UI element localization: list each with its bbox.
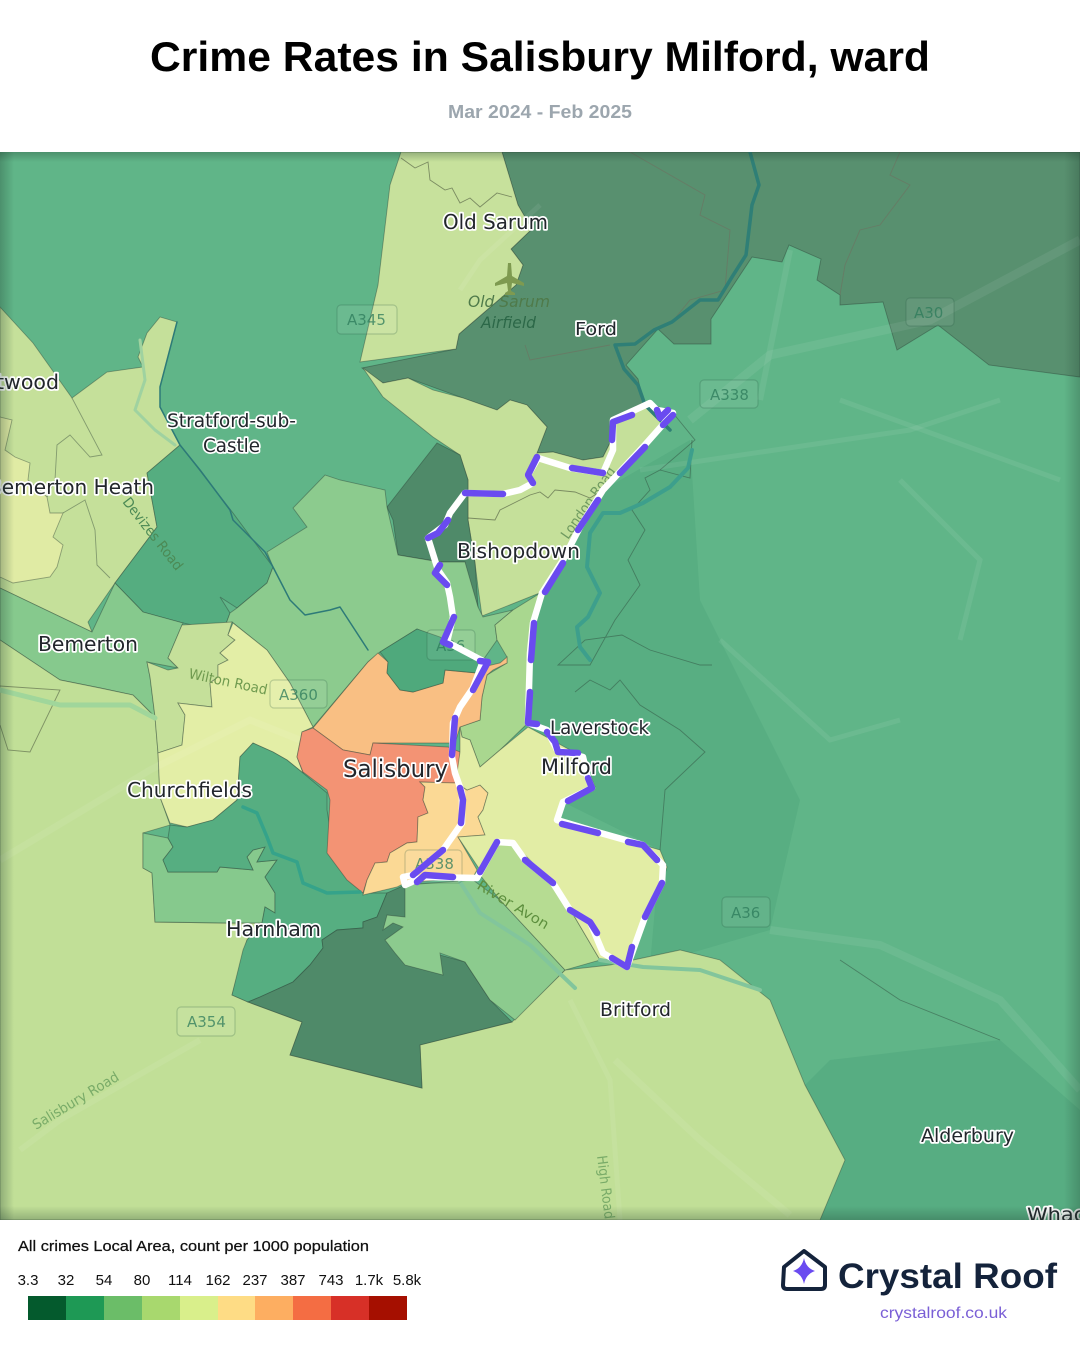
road shields: A30 xyxy=(914,304,943,322)
subtitle: date range: Mar 2024 - Feb 2025 xyxy=(448,102,632,122)
region: Alderbury xyxy=(805,1040,1080,1220)
region: Bishopdown xyxy=(363,368,673,616)
place labels: Milford xyxy=(541,755,612,779)
place labels: Alderbury xyxy=(921,1125,1014,1147)
region: central Salisbury salmon xyxy=(297,728,460,893)
ward boundary: purple dashes xyxy=(413,410,673,967)
legend scale values: 5.8k xyxy=(393,1272,422,1289)
road and river labels: Salisbury Road xyxy=(30,1069,122,1133)
place labels xyxy=(0,210,1080,1226)
road and river labels: London Road xyxy=(558,464,619,542)
region: Laverstock strip xyxy=(460,592,542,767)
road and river labels xyxy=(30,292,619,1220)
legend scale values: 237 xyxy=(242,1272,268,1289)
legend title: All crimes Local Area, count per 1000 population xyxy=(18,1238,369,1255)
place labels: Whad xyxy=(1027,1204,1080,1226)
map edge shading xyxy=(0,152,1080,1220)
road and river labels: Old Sarum xyxy=(468,292,550,311)
region: Stratford west xyxy=(115,445,273,632)
legend xyxy=(18,1238,422,1320)
legend scale values xyxy=(18,1272,422,1289)
road shields: A345 xyxy=(347,311,386,329)
region: boundaries east xyxy=(558,413,1000,1040)
region: Milford south strip xyxy=(480,842,600,970)
legend scale values: 743 xyxy=(318,1272,344,1289)
website url: crystalroof.co.uk xyxy=(880,1305,1008,1322)
road shields: A36 xyxy=(731,904,760,922)
place labels: Laverstock xyxy=(550,717,649,739)
legend scale values: 387 xyxy=(280,1272,306,1289)
region: darker band east of the river xyxy=(570,442,762,949)
place labels: Old Sarum xyxy=(443,210,548,234)
legend colour bar xyxy=(28,1296,407,1320)
region: Wilton lime block xyxy=(147,622,235,753)
choropleth map xyxy=(0,152,1080,1226)
road shields: A354 xyxy=(187,1013,226,1031)
road and river labels: High Road xyxy=(593,1155,617,1220)
place labels: Bemerton xyxy=(38,632,138,656)
region: dark south Harnham xyxy=(248,885,512,1088)
region: south Salisbury peach xyxy=(363,782,488,895)
road shields: A338 xyxy=(710,386,749,404)
icon: airfield plane xyxy=(495,263,524,295)
region: Churchfields xyxy=(158,623,313,827)
place labels: Britford xyxy=(600,999,671,1021)
place labels: Ford xyxy=(575,319,617,340)
legend scale values: 114 xyxy=(168,1272,192,1289)
legend scale values: 32 xyxy=(58,1272,74,1289)
road shields: A338 xyxy=(415,855,454,873)
region: green inside orange xyxy=(380,629,480,692)
road and river labels: Airfield xyxy=(480,313,537,332)
region: Old Sarum xyxy=(360,152,532,362)
place labels: Castle xyxy=(203,435,260,457)
logo: Crystal Roof xyxy=(783,1251,1057,1322)
region: north-east low crime area xyxy=(0,152,1080,1220)
place labels: Harnham xyxy=(226,917,321,941)
title: Crime Rates in Salisbury Milford, ward xyxy=(150,33,930,80)
region: Harnham green xyxy=(163,743,387,1002)
place labels: Bishopdown xyxy=(457,539,580,563)
legend scale values: 1.7k xyxy=(355,1272,384,1289)
region: south rural light area xyxy=(0,640,845,1220)
region: Harnham medium xyxy=(143,833,277,923)
icon: house with star xyxy=(783,1251,825,1289)
place labels: Stratford-sub- xyxy=(167,410,296,432)
road shields: A360 xyxy=(279,686,318,704)
roads xyxy=(158,204,1080,1092)
road shields: A36 xyxy=(436,637,465,655)
region: north Salisbury orange xyxy=(313,653,507,755)
region: dark patch west of Bishopdown xyxy=(387,443,478,607)
region: Bemerton xyxy=(0,583,183,717)
rivers xyxy=(0,152,760,990)
ward boundary: Milford (white line) xyxy=(403,403,673,967)
place labels: Salisbury xyxy=(343,755,448,783)
road and river labels: Wilton Road xyxy=(187,666,269,699)
region: Milford ward xyxy=(457,727,667,967)
logo wordmark: Crystal Roof xyxy=(838,1257,1057,1296)
place labels: Churchfields xyxy=(127,778,252,802)
legend scale values: 162 xyxy=(205,1272,231,1289)
legend scale values: 80 xyxy=(134,1272,150,1289)
road and river labels: River Avon xyxy=(474,878,552,933)
region: Bemerton Heath xyxy=(0,307,180,632)
region: medium east of Harnham xyxy=(383,880,565,1020)
legend scale values: 3.3 xyxy=(18,1272,38,1289)
road and river labels: Devizes Road xyxy=(119,495,186,574)
region: medium north Salisbury xyxy=(223,475,513,727)
road shields xyxy=(177,298,954,1036)
legend scale values: 54 xyxy=(96,1272,112,1289)
